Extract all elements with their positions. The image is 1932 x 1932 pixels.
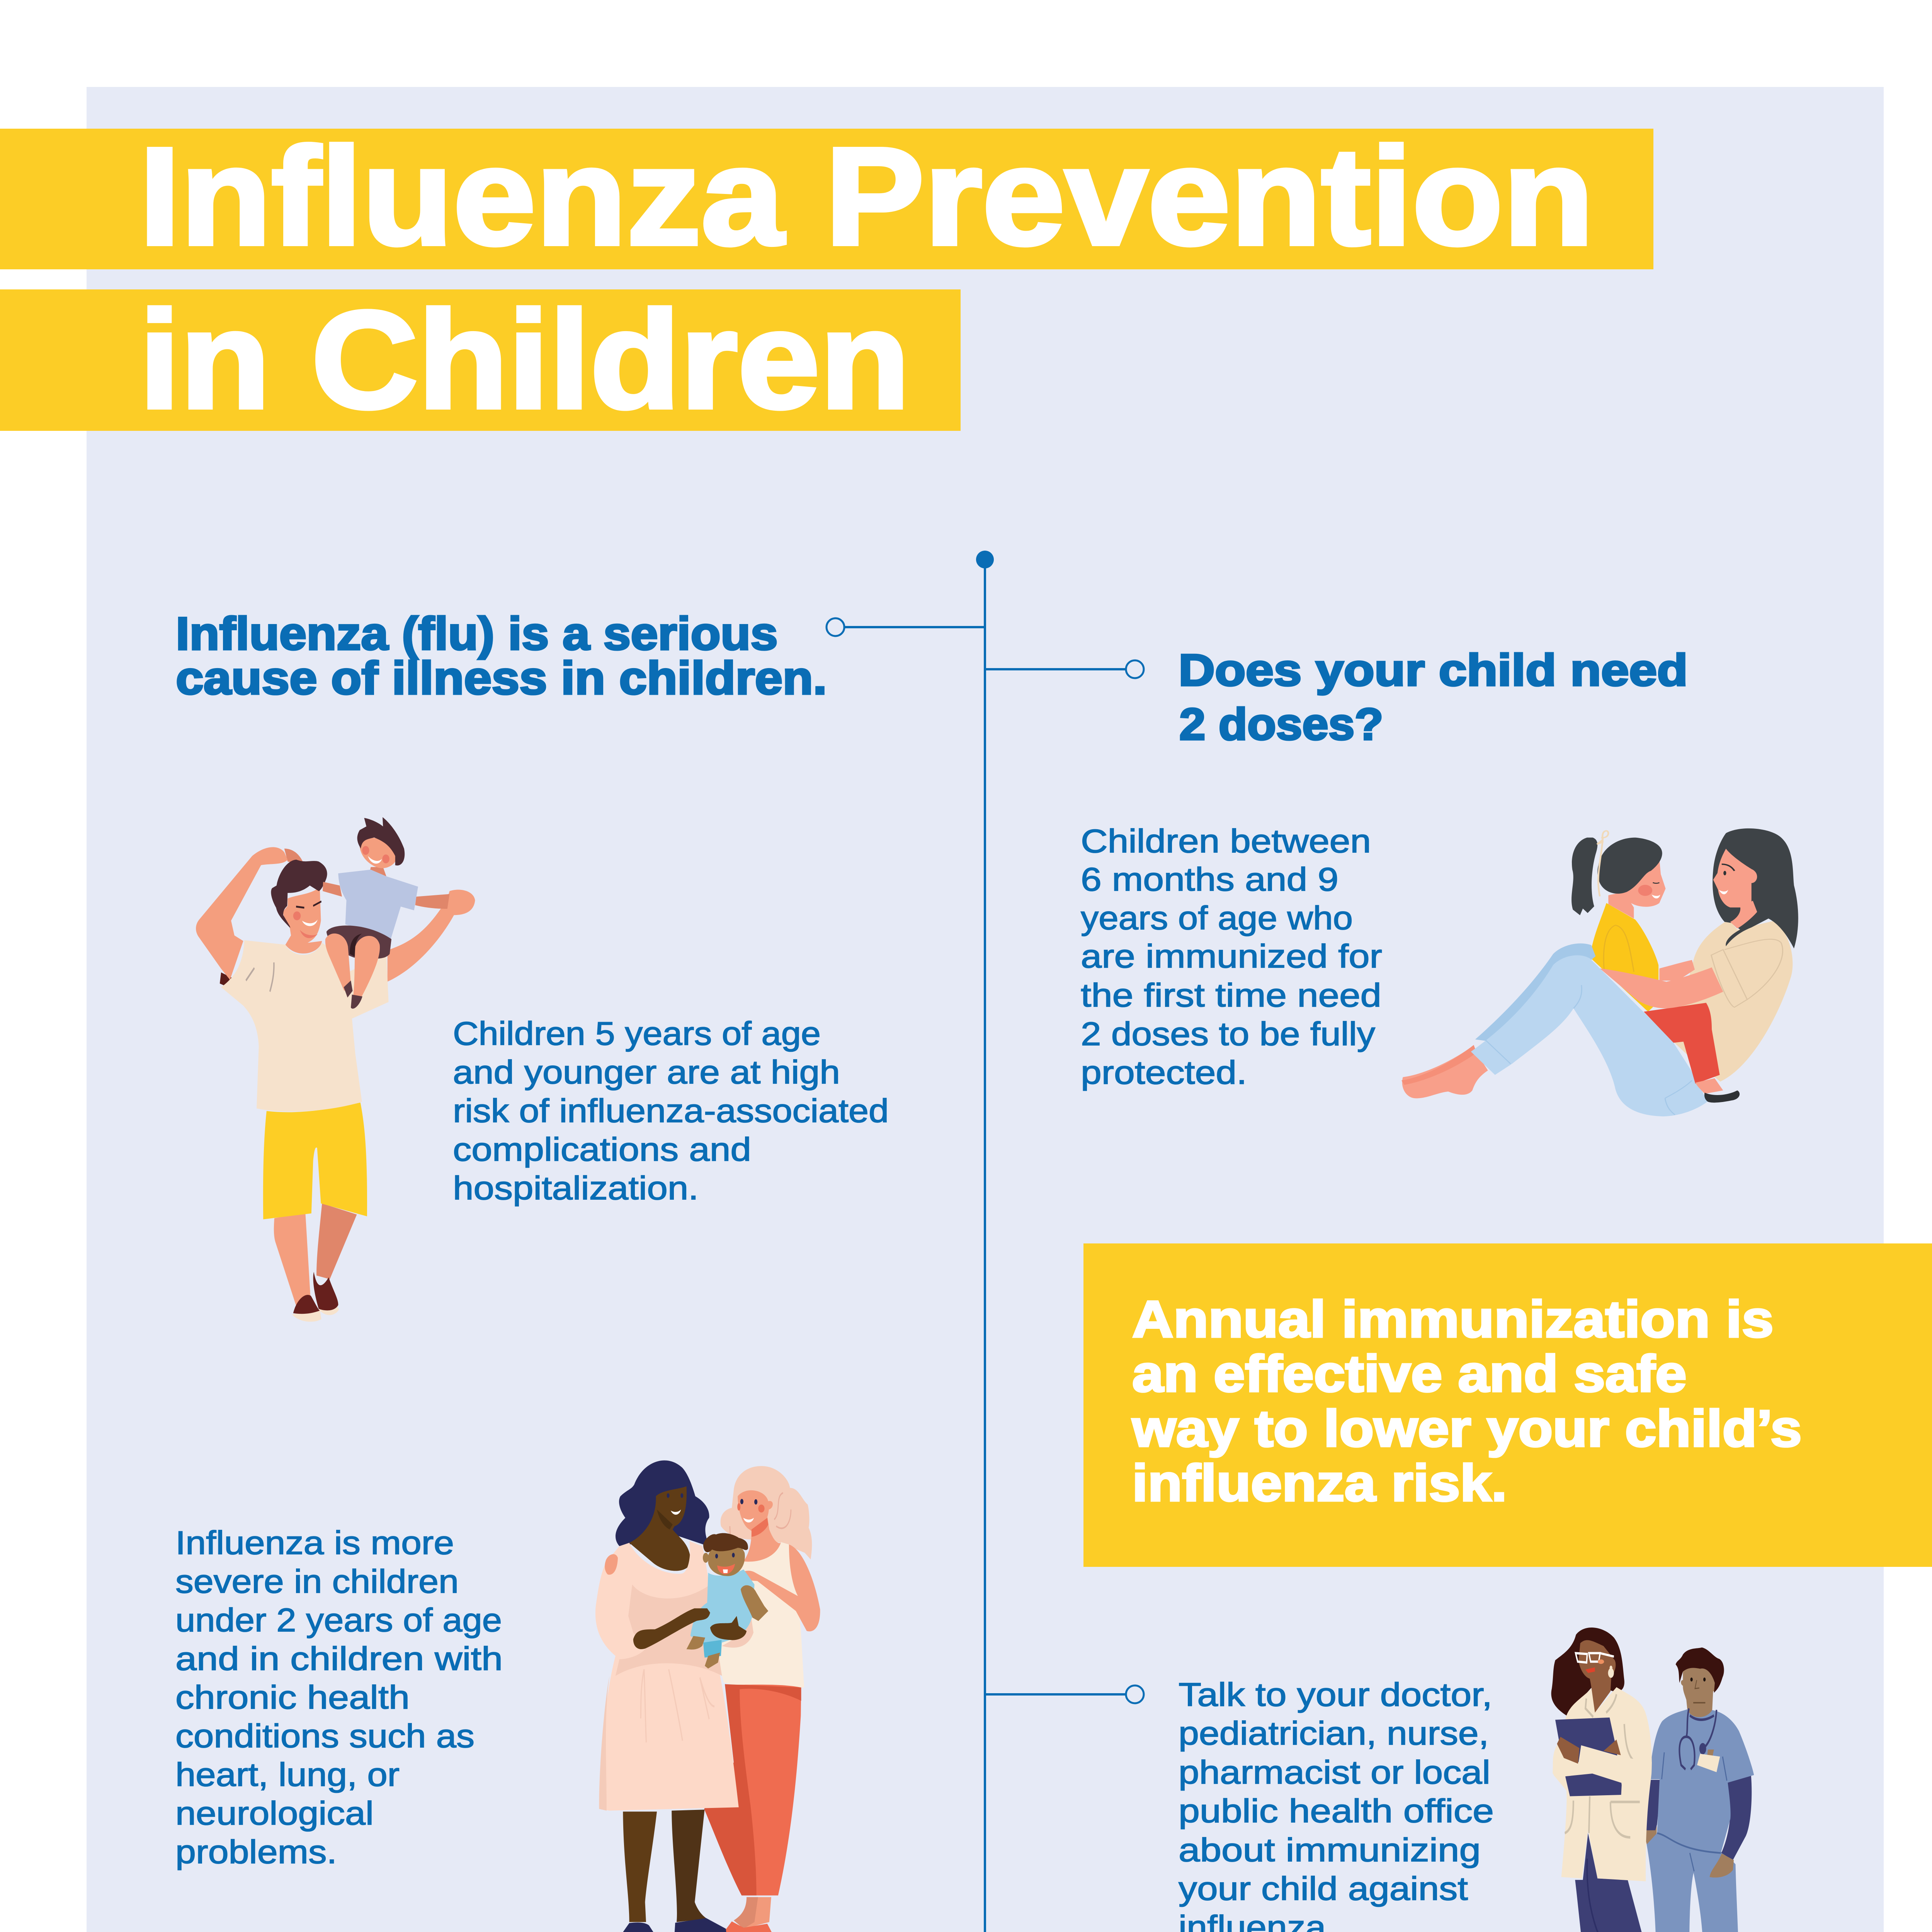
text: talk to your doctor: your child against	[1179, 1871, 1468, 1907]
heading: influenza serious: cause of illness in children.	[176, 652, 827, 704]
text: more severe under 2: and in children with	[175, 1641, 503, 1677]
heading: influenza serious: Influenza (flu) is a serious	[176, 608, 778, 660]
illustration: doctor and nurse	[1551, 1628, 1754, 1932]
callout: annual immunization: Annual immunization is	[1132, 1291, 1774, 1348]
text: talk to your doctor: pharmacist or local	[1179, 1754, 1490, 1791]
text: more severe under 2: chronic health	[175, 1679, 410, 1716]
text: two doses explanation: years of age who	[1081, 900, 1353, 937]
text: two doses explanation: protected.	[1081, 1054, 1247, 1091]
text: children 5 years and younger: complications and	[453, 1131, 751, 1168]
text: two doses explanation: Children between	[1081, 823, 1371, 860]
text: more severe under 2: severe in children	[175, 1563, 459, 1600]
callout: annual immunization: an effective and safe	[1132, 1345, 1687, 1403]
heading: two doses: Does your child need	[1179, 645, 1688, 695]
text: two doses explanation	[1081, 823, 1382, 1091]
text: two doses explanation: 2 doses to be fully	[1081, 1016, 1376, 1053]
callout: annual immunization: influenza risk.	[1132, 1454, 1507, 1512]
heading: two doses	[1179, 645, 1688, 749]
text: children 5 years and younger: hospitalization.	[453, 1170, 699, 1207]
heading: influenza serious	[176, 608, 827, 704]
illustration: mother holding daughter	[1401, 828, 1798, 1116]
title: Influenza Prevention	[139, 119, 1594, 274]
text: talk to your doctor: pediatrician, nurse,	[1179, 1715, 1489, 1752]
title: in Children	[139, 282, 910, 437]
callout: annual immunization	[1083, 1243, 1932, 1567]
text: two doses explanation: 6 months and 9	[1081, 861, 1338, 898]
text: more severe under 2: heart, lung, or	[175, 1757, 400, 1793]
text: two doses explanation: the first time need	[1081, 977, 1381, 1014]
text: children 5 years and younger: Children 5 years of age	[453, 1015, 821, 1052]
timeline with branches	[827, 551, 1144, 1932]
text: children 5 years and younger: and younger are at high	[453, 1054, 840, 1091]
title	[0, 119, 1653, 437]
text: two doses explanation: are immunized for	[1081, 938, 1382, 975]
text: talk to your doctor: about immunizing	[1179, 1832, 1481, 1869]
text: more severe under 2: under 2 years of age	[175, 1602, 502, 1639]
text: talk to your doctor: public health office	[1179, 1793, 1494, 1830]
text: more severe under 2	[175, 1525, 503, 1871]
text: more severe under 2: conditions such as	[175, 1718, 474, 1755]
text: children 5 years and younger: risk of influenza-associated	[453, 1093, 889, 1129]
text: talk to your doctor: Talk to your doctor,	[1179, 1677, 1492, 1713]
illustration: father with son on shoulders	[196, 817, 475, 1322]
callout: annual immunization: way to lower your child’s	[1132, 1400, 1802, 1458]
text: more severe under 2: problems.	[175, 1834, 337, 1871]
text: more severe under 2: neurological	[175, 1795, 374, 1832]
text: talk to your doctor	[1179, 1677, 1494, 1932]
heading: two doses: 2 doses?	[1179, 699, 1383, 749]
text: children 5 years and younger	[453, 1015, 889, 1207]
illustration: two mothers with baby	[595, 1461, 820, 1932]
text: more severe under 2: Influenza is more	[175, 1525, 454, 1561]
